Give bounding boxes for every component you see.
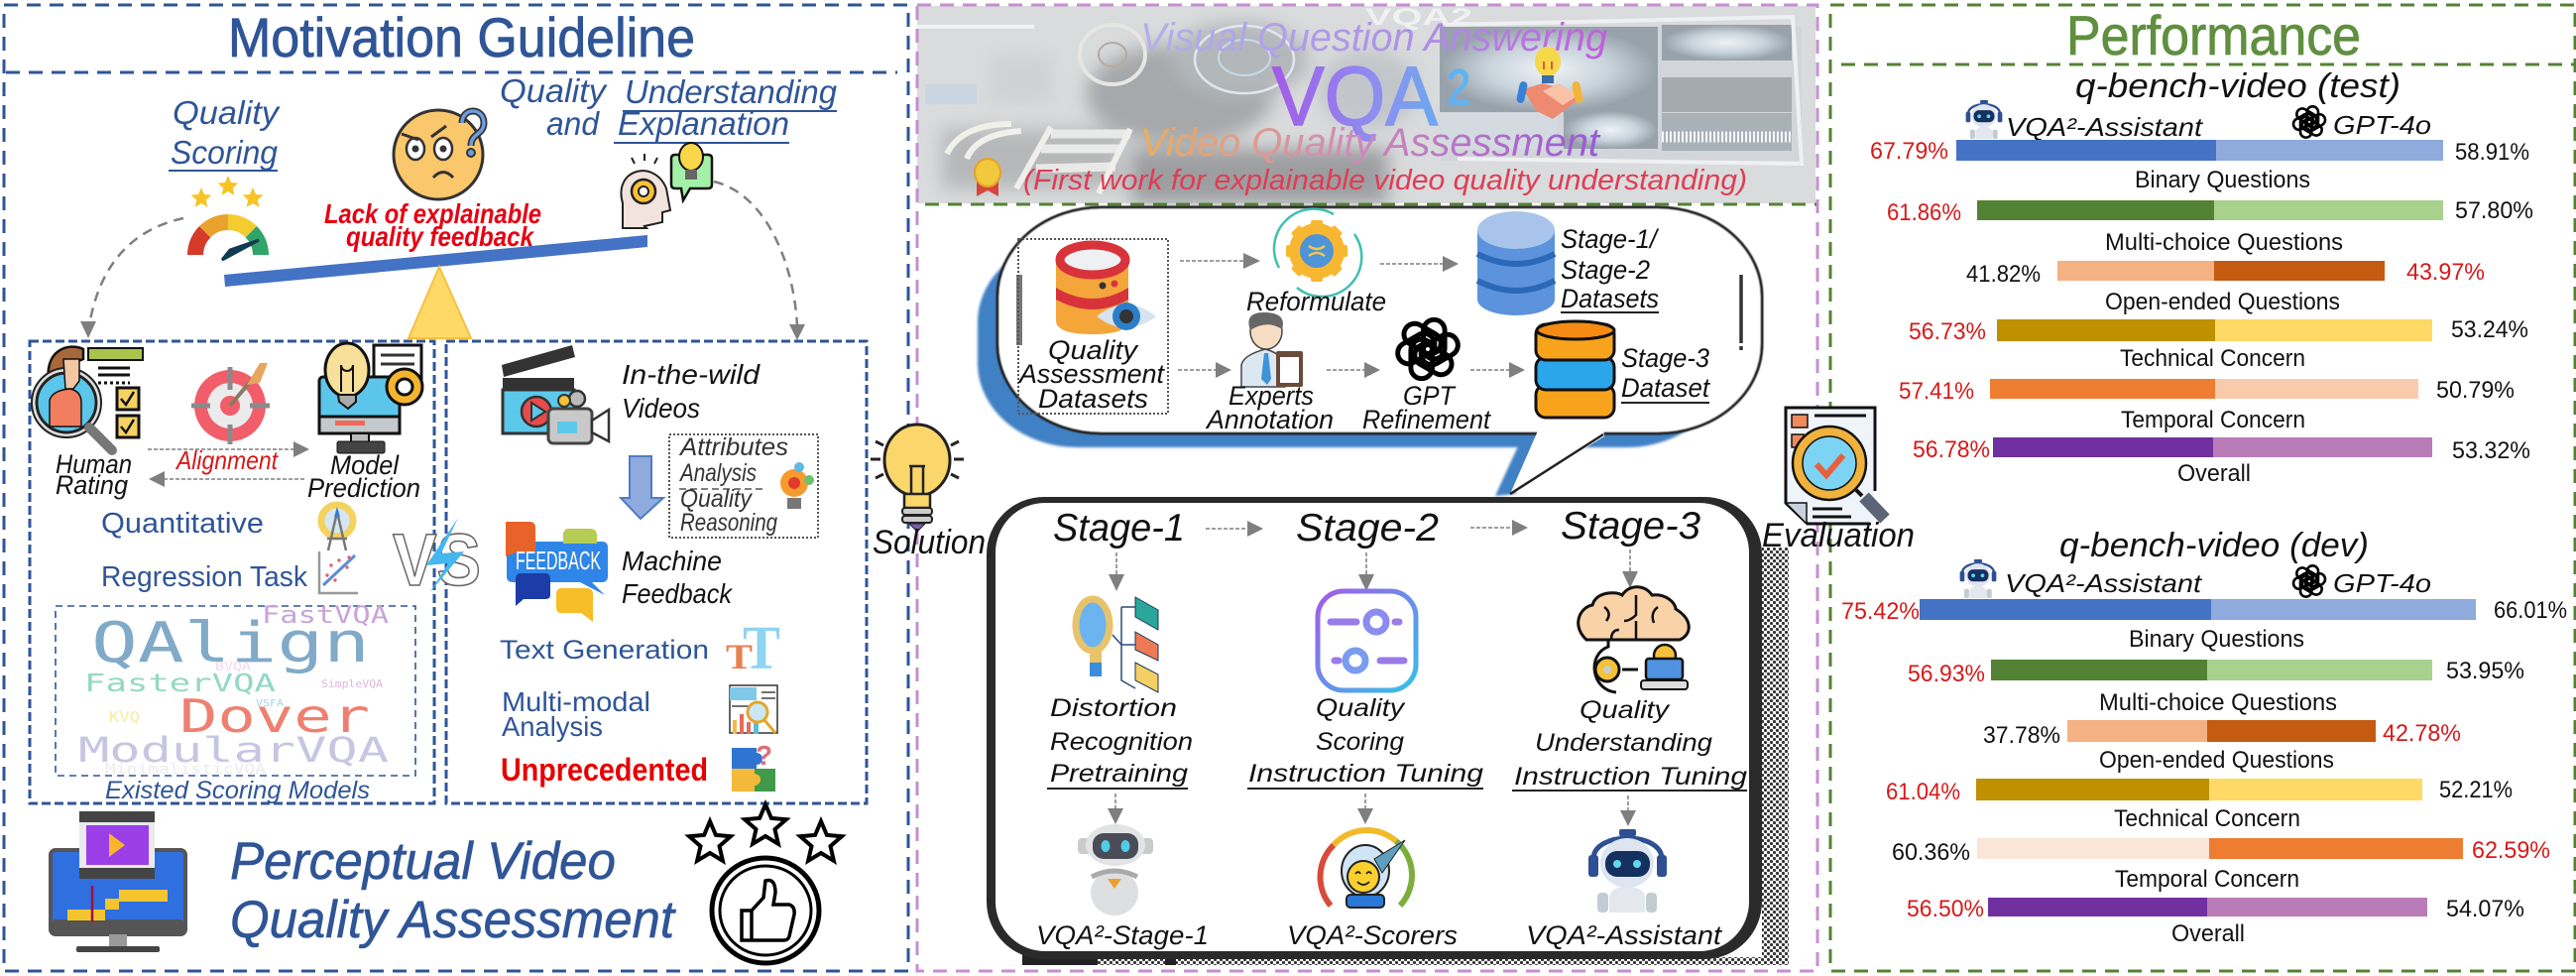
banner image: display wall	[1440, 17, 1802, 164]
word cloud: existing scoring models: VSFA	[256, 698, 284, 709]
bar: open-ended questions: 41.82%	[1966, 261, 2041, 288]
bar: overall dev: 56.50%	[1907, 896, 1984, 922]
banner: VQA2 title	[917, 4, 1815, 203]
text: visual question answering: Visual Question Answering	[1140, 16, 1607, 60]
arrow: stage-2 down	[1358, 552, 1374, 591]
icon: solution bulb	[871, 425, 964, 532]
icon: gauge with stars	[191, 176, 263, 260]
label: quality understanding and explanation: and	[546, 105, 601, 142]
label: human rating	[56, 449, 132, 500]
label: quality understanding instruction tuning: Instruction Tuning	[1514, 763, 1747, 791]
icon: reformulate gear	[1274, 209, 1361, 297]
chart title: dev: q-bench-video (dev)	[2059, 527, 2369, 564]
icon: target	[191, 363, 270, 444]
panel: training stages	[987, 497, 1789, 965]
icon: VS badge: VS	[393, 519, 481, 601]
group: quality assessment datasets: Assessment	[1017, 359, 1165, 389]
icon: quality sliders	[1318, 591, 1416, 690]
icon: head with idea bubble	[621, 143, 712, 228]
label: regression task: Regression Task	[101, 561, 307, 593]
group: quality assessment datasets	[1017, 239, 1168, 414]
icon: gpt logo	[1394, 319, 1462, 379]
callout: attributes analysis quality reasoning: Reasoning	[680, 509, 777, 537]
arrow: stage-2 to model	[1357, 793, 1373, 824]
heading: stage-1: Stage-1	[1053, 507, 1185, 549]
panel: quality scoring models	[30, 341, 434, 804]
arrow: explanation to feedback	[714, 182, 805, 340]
label: stage-1 stage-2 datasets: Stage-2	[1561, 255, 1650, 285]
label: quality scoring	[169, 94, 282, 172]
label: multi-modal analysis	[502, 686, 650, 742]
word cloud: existing scoring models: FastVQA	[262, 601, 390, 629]
label: evaluation: Evaluation	[1762, 517, 1915, 554]
label: stage-1 stage-2 datasets	[1561, 224, 1659, 313]
label: gpt refinement	[1362, 381, 1491, 434]
arrow: gpt to dataset	[1470, 362, 1525, 378]
arrow: experts to gpt	[1327, 362, 1380, 378]
bar: multi-choice questions dev: 56.93%	[1908, 661, 1985, 687]
label: quality understanding instruction tuning: Understanding	[1535, 729, 1712, 757]
arrow: alignment back	[149, 471, 304, 487]
bar: binary questions	[1870, 138, 2529, 193]
panel: performance	[1830, 4, 2575, 971]
label: gpt refinement: Refinement	[1362, 405, 1491, 434]
heading: perceptual video quality assessment: Quality Assessment	[230, 891, 676, 949]
bar: open-ended questions: 43.97%	[2406, 259, 2485, 286]
icon: model prediction	[319, 343, 422, 453]
bar: overall dev: Overall	[2171, 920, 2245, 947]
label: VQA2-Scorers: VQA²-Scorers	[1287, 920, 1458, 950]
legend: VQA2-Assistant: VQA²-Assistant	[2006, 112, 2204, 142]
bar: overall	[1913, 436, 2530, 487]
callout: attributes analysis quality reasoning	[669, 433, 818, 538]
label: machine feedback: Feedback	[622, 578, 734, 609]
word cloud: existing scoring models: Dover	[179, 689, 370, 743]
bar: technical concern: 53.24%	[2451, 316, 2528, 343]
label: quality scoring: Quality	[173, 94, 282, 131]
bar: temporal concern dev	[1892, 837, 2550, 893]
word cloud: existing scoring models: KVQ	[109, 708, 140, 726]
word cloud: existing scoring models: MinimalisticVQA	[105, 762, 267, 778]
label: alignment: Alignment	[175, 445, 280, 475]
bar: open-ended questions dev: Open-ended Questions	[2099, 747, 2334, 774]
word cloud: existing scoring models: FasterVQA	[84, 669, 276, 697]
bar: binary questions dev	[1841, 597, 2567, 653]
label: multi-modal analysis: Multi-modal	[502, 686, 650, 717]
arrow: stage-1 to stage-2	[1206, 521, 1263, 537]
icon: feedback bubbles: FEEDBACK	[516, 546, 601, 575]
icon: orange database	[1536, 321, 1614, 418]
label: quality scoring instruction tuning: Scoring	[1316, 728, 1404, 756]
label: multi-modal analysis: Analysis	[502, 711, 603, 742]
label: unprecedented: Unprecedented	[501, 752, 708, 788]
bar: binary questions dev: 75.42%	[1841, 598, 1920, 625]
bar: binary questions: Binary Questions	[2135, 167, 2310, 193]
group: quality assessment datasets: Datasets	[1038, 384, 1148, 414]
bar: multi-choice questions: 61.86%	[1887, 199, 1961, 226]
word cloud: existing scoring models: BVQA	[215, 660, 252, 673]
legend: VQA2-Assistant dev: VQA²-Assistant	[2005, 568, 2203, 598]
bar: open-ended questions dev	[1983, 720, 2461, 774]
panel: motivation guideline	[4, 5, 908, 971]
legend: VQA2-Assistant dev	[1960, 559, 2203, 598]
bar: open-ended questions: Open-ended Questions	[2105, 289, 2340, 315]
label: quality understanding instruction tuning: Quality	[1580, 696, 1671, 724]
legend: GPT-4o	[2291, 106, 2431, 140]
label: human rating: Rating	[56, 470, 128, 500]
label: distortion recognition pretraining	[1047, 694, 1193, 790]
bar: overall dev: 54.07%	[2446, 896, 2524, 922]
icon: feedback bubbles	[506, 522, 608, 622]
legend: GPT-4o dev	[2291, 565, 2431, 598]
icon: compass	[321, 505, 353, 550]
label: machine feedback	[622, 546, 734, 609]
bar: technical concern dev: 52.21%	[2439, 777, 2513, 803]
heading: perceptual video quality assessment: Perceptual Video	[230, 832, 616, 891]
caption: existed scoring models: Existed Scoring Models	[105, 777, 370, 804]
word cloud: existing scoring models: QAlign	[91, 611, 370, 675]
bar: temporal concern	[1899, 377, 2515, 433]
label: quality understanding and explanation: Explanation	[618, 105, 789, 142]
banner image: robot details	[917, 25, 1294, 193]
word cloud: existing scoring models: SimpleVQA	[321, 677, 383, 690]
icon: gear bulb	[780, 462, 814, 509]
label: quantitative: Quantitative	[101, 508, 264, 540]
arrow: stage-3 down	[1622, 549, 1638, 588]
icon: report with magnifier	[730, 685, 777, 734]
arrow: datasets to experts	[1178, 362, 1231, 378]
bar: binary questions: 58.91%	[2455, 139, 2529, 166]
group: quality assessment datasets: Quality	[1048, 335, 1139, 365]
word cloud: existing scoring models: ModularVQA	[78, 731, 389, 771]
label: quality scoring instruction tuning: Quality	[1316, 694, 1406, 722]
icon: puzzle with question mark: ?	[756, 740, 772, 771]
label: gpt refinement: GPT	[1403, 381, 1457, 411]
label: quality scoring: Scoring	[171, 134, 279, 171]
text: VQA squared logo: 2	[1447, 60, 1470, 115]
icon: medal	[975, 159, 1000, 196]
bar: multi-choice questions dev: 53.95%	[2446, 658, 2524, 684]
callout: attributes analysis quality reasoning: Quality	[680, 485, 753, 513]
bar: multi-choice questions dev	[1908, 658, 2524, 716]
arrow: scoring to models	[80, 218, 183, 338]
label: in-the-wild videos: Videos	[622, 393, 700, 424]
arrow: stage-2 to stage-3	[1470, 520, 1528, 536]
bar: temporal concern: Temporal Concern	[2121, 407, 2305, 433]
arrow: reformulate to datasets	[1380, 256, 1459, 272]
text: first work note: (First work for explainable video quality understanding)	[1023, 165, 1747, 196]
chart: q-bench-video dev	[1841, 527, 2567, 947]
bar: binary questions: 67.79%	[1870, 138, 1948, 165]
speech bubble: dataset pipeline	[978, 207, 1762, 496]
callout: lack of explainable quality feedback: quality feedback	[346, 221, 534, 252]
heading: stage-2: Stage-2	[1296, 507, 1439, 549]
icon: stage-1 robot	[1078, 824, 1153, 915]
arrow: stage-3 to model	[1620, 795, 1636, 826]
label: quality scoring instruction tuning: Instruction Tuning	[1248, 760, 1483, 788]
icon: evaluation report and magnifier	[1786, 408, 1885, 524]
icon: handshake and bulb	[1516, 47, 1583, 119]
chart: q-bench-video test	[1870, 67, 2533, 487]
label: experts annotation: Experts	[1229, 381, 1314, 411]
frame: solution border	[917, 5, 1817, 971]
label: text generation: Text Generation	[500, 635, 709, 665]
icon: text size	[726, 615, 780, 682]
bar: temporal concern dev: 62.59%	[2472, 837, 2550, 864]
icon: text size: T	[743, 615, 780, 682]
icon: text size: T	[726, 637, 753, 676]
panel: VQA2 solution	[917, 4, 1817, 971]
bar: technical concern dev: Technical Concern	[2114, 805, 2300, 832]
callout: attributes analysis quality reasoning: Analysis	[678, 459, 757, 487]
label: distortion recognition pretraining: Pretraining	[1050, 760, 1188, 788]
label: reformulate: Reformulate	[1246, 287, 1386, 316]
bar: binary questions dev: 66.01%	[2494, 597, 2567, 624]
chart title: test: q-bench-video (test)	[2075, 67, 2400, 105]
text: VQA squared logo: VQA	[1272, 50, 1438, 143]
label: machine feedback: Machine	[622, 546, 722, 576]
label: quality understanding instruction tuning	[1512, 696, 1747, 792]
heading: performance: Performance	[2066, 4, 2361, 66]
bar: overall: 53.32%	[2452, 437, 2530, 464]
label: in-the-wild videos: In-the-wild	[622, 359, 761, 390]
arrow: datasets to reformulate	[1180, 253, 1260, 269]
icon: confused face	[394, 110, 484, 199]
arrow: stage-1 to model	[1108, 793, 1123, 824]
bar: open-ended questions dev: 37.78%	[1983, 722, 2060, 749]
bar: multi-choice questions dev: Multi-choice Questions	[2099, 689, 2337, 716]
heading: motivation guideline: Motivation Guideline	[228, 6, 695, 68]
bar: multi-choice questions: 57.80%	[2455, 197, 2533, 224]
label: VQA2-Stage-1: VQA²-Stage-1	[1036, 920, 1209, 950]
callout: lack of explainable quality feedback	[324, 198, 541, 252]
label: stage-1 stage-2 datasets: Datasets	[1561, 284, 1659, 313]
icon: scatter chart	[319, 551, 358, 593]
bar: overall: Overall	[2177, 460, 2251, 487]
label: stage-3 dataset	[1621, 343, 1710, 404]
label: experts annotation	[1205, 381, 1334, 434]
icon: video clapper and camera	[502, 345, 609, 443]
label: experts annotation: Annotation	[1205, 405, 1334, 434]
bar: technical concern: 56.73%	[1909, 318, 1986, 345]
bar: overall: 56.78%	[1913, 436, 1990, 463]
faint banner label: VQA2	[1365, 4, 1472, 31]
label: distortion recognition pretraining: Distortion	[1050, 694, 1177, 722]
bar: temporal concern dev: Temporal Concern	[2115, 866, 2299, 893]
callout: lack of explainable quality feedback: Lack of explainable	[324, 198, 541, 229]
label: stage-3 dataset: Dataset	[1621, 373, 1710, 403]
label: model prediction	[307, 450, 420, 503]
bar: multi-choice questions	[1887, 197, 2533, 256]
legend: VQA2-Assistant	[1966, 100, 2204, 142]
arrow: videos to feedback	[621, 456, 663, 519]
label: stage-1 stage-2 datasets: Stage-1/	[1561, 224, 1659, 254]
arrow: alignment forward	[148, 441, 309, 457]
icon: assistant robot	[1588, 829, 1667, 913]
word cloud: existing scoring models	[56, 601, 415, 778]
label: distortion recognition pretraining: Recognition	[1050, 728, 1193, 756]
legend: GPT-4o dev: GPT-4o	[2333, 568, 2431, 598]
bar: technical concern	[1909, 316, 2528, 372]
bar: open-ended questions dev: 42.78%	[2383, 720, 2461, 747]
bar: binary questions dev: Binary Questions	[2129, 626, 2304, 653]
arrow: stage-1 down	[1109, 552, 1124, 591]
icon: distortion recognition	[1076, 597, 1158, 692]
icon: monitor with video	[51, 811, 185, 952]
bar: temporal concern: 50.79%	[2436, 377, 2515, 404]
label: quality understanding and explanation: Quality	[500, 72, 609, 109]
icon: blue database	[1477, 211, 1555, 315]
bar: temporal concern: 57.41%	[1899, 378, 1974, 405]
legend: GPT-4o: GPT-4o	[2333, 110, 2431, 140]
label: stage-3 dataset: Stage-3	[1621, 343, 1709, 373]
icon: scorer gauge	[1321, 830, 1412, 908]
label: model prediction: Prediction	[307, 473, 420, 503]
icon: thumbs up with stars	[689, 804, 842, 963]
heading: stage-3: Stage-3	[1561, 505, 1700, 548]
label: quality understanding and explanation	[500, 72, 838, 144]
bar: temporal concern dev: 60.36%	[1892, 839, 1970, 866]
label: in-the-wild videos	[622, 359, 761, 424]
icon: expert	[1241, 312, 1303, 387]
label: human rating: Human	[56, 449, 132, 479]
icon: human rating	[32, 347, 143, 450]
icon: seesaw	[224, 235, 647, 338]
text: video quality assessment: Video Quality Assessment	[1140, 121, 1601, 165]
bar: technical concern dev	[1886, 777, 2513, 832]
bar: open-ended questions	[1966, 259, 2485, 315]
bar: technical concern: Technical Concern	[2120, 345, 2305, 372]
panel: quality understanding	[446, 341, 867, 803]
label: VQA2-Assistant: VQA²-Assistant	[1526, 920, 1723, 950]
callout: attributes analysis quality reasoning: Attributes	[678, 433, 788, 461]
label: solution: Solution	[873, 524, 986, 561]
bar: overall dev	[1907, 896, 2524, 947]
label: model prediction: Model	[330, 450, 400, 480]
heading: perceptual video quality assessment	[230, 832, 676, 949]
icon: puzzle with question mark	[732, 740, 775, 792]
label: quality understanding and explanation: Understanding	[625, 73, 838, 110]
bar: multi-choice questions: Multi-choice Questions	[2105, 229, 2343, 256]
icon: brain and gear	[1579, 587, 1689, 692]
label: quality scoring instruction tuning	[1247, 694, 1483, 790]
bar: technical concern dev: 61.04%	[1886, 779, 1960, 805]
